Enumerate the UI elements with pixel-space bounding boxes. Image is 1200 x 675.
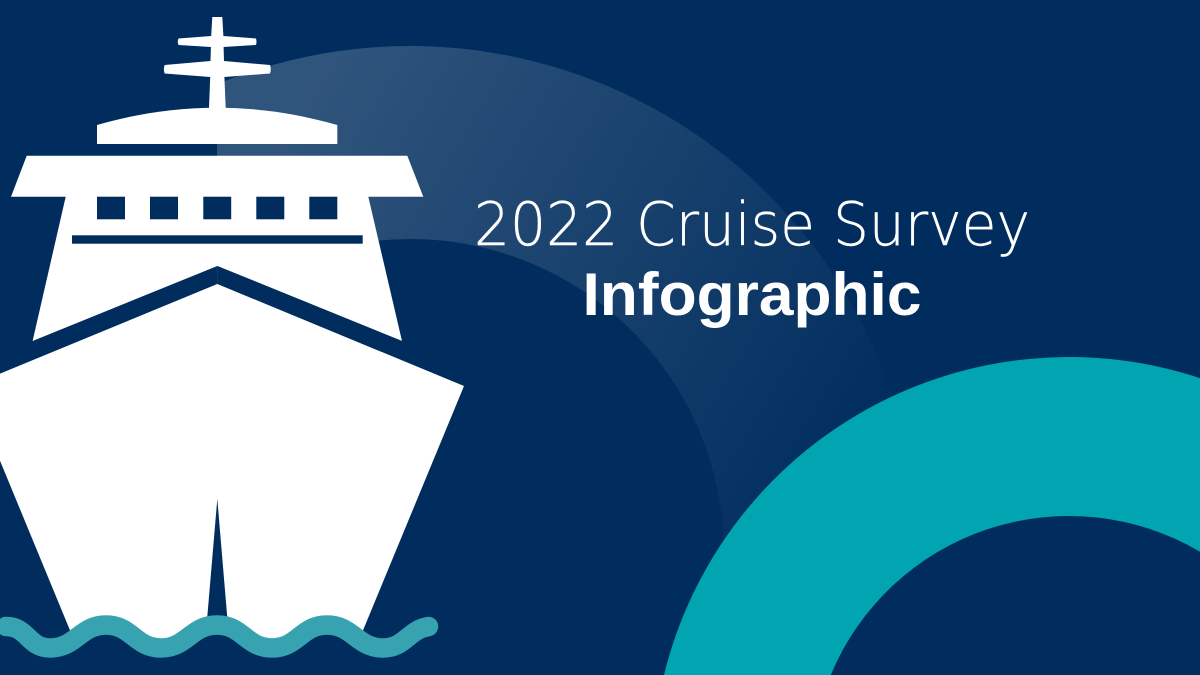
hull [0, 284, 464, 648]
windows [72, 197, 363, 244]
chevron gap [217, 266, 464, 386]
waves [6, 625, 428, 648]
mast [164, 17, 271, 108]
title line 2: Infographic [582, 261, 922, 328]
faded arc [217, 46, 917, 553]
title [474, 190, 1030, 328]
icon: cruise ship [0, 17, 464, 648]
title line 1: 2022 Cruise Survey [474, 190, 1030, 260]
keel notch [206, 499, 228, 626]
bridge [11, 156, 423, 341]
teal ring [664, 357, 1200, 675]
upper deck [97, 108, 337, 144]
